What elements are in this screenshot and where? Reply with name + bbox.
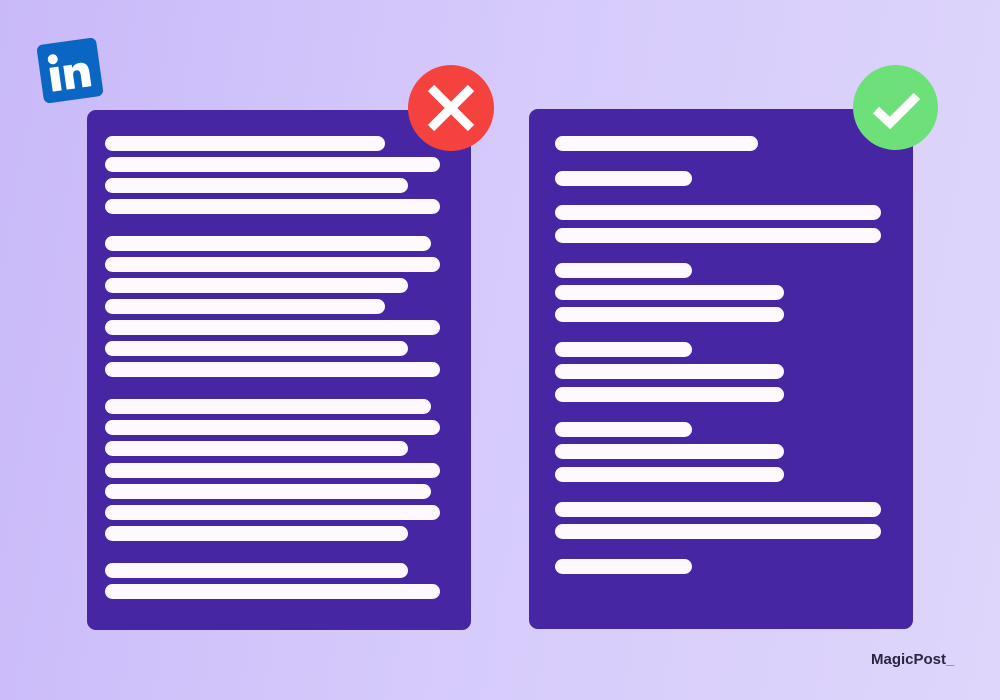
brand text: MagicPost_ [871,651,954,668]
icon: red cross [408,65,494,151]
panel: bad example (dense text) [87,110,471,630]
icon: green check [853,65,938,150]
panel: good example (spaced text) [529,109,913,629]
icon: linkedin logo [36,37,104,104]
